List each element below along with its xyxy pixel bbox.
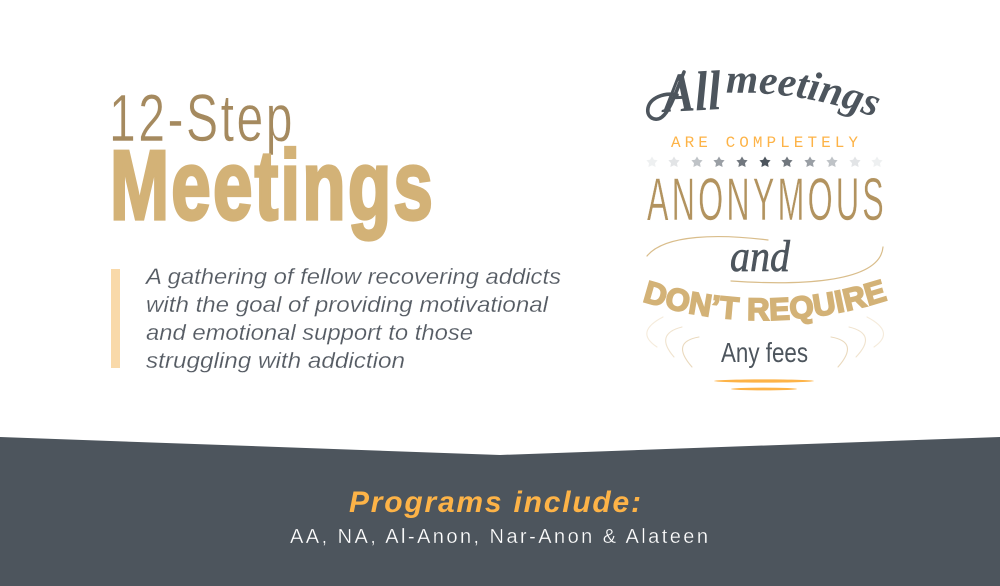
title line: Meetings: Meetings [110, 130, 435, 240]
word: meetings: meetings [726, 72, 880, 117]
word: All: All [659, 60, 723, 125]
banner background [0, 437, 1000, 586]
flourish curves around "and" [647, 237, 883, 283]
description text block: struggling with addiction [146, 348, 405, 373]
script word: and: and [730, 232, 791, 281]
banner list of programs: AA, NA, Al-Anon, Nar-Anon & Alateen [290, 526, 708, 548]
swash on the capital A [648, 72, 684, 119]
wing flourishes [647, 317, 883, 367]
description text block: with the goal of providing motivational [146, 292, 549, 317]
description text block: and emotional support to those [146, 320, 473, 345]
bottom banner [0, 437, 1000, 586]
script heading: All meetings [646, 60, 880, 125]
description text block: A gathering of fellow recovering addicts [144, 264, 561, 289]
text: Any fees: Any fees [721, 337, 808, 368]
description text block [144, 264, 561, 373]
banner heading: Programs include: Programs include: [349, 486, 641, 519]
orange underline strokes [714, 379, 814, 390]
title line: 12-Step: 12-Step [109, 81, 295, 156]
typographic badge: anonymous and free [642, 60, 888, 390]
title: 12-Step Meetings [109, 81, 435, 240]
curved word: DON'T REQUIRE: DON’T REQUIRE [642, 278, 888, 324]
subheading: are completely: ARE COMPLETELY [671, 134, 858, 152]
accent bar [111, 269, 120, 368]
row of fading stars [646, 156, 883, 167]
